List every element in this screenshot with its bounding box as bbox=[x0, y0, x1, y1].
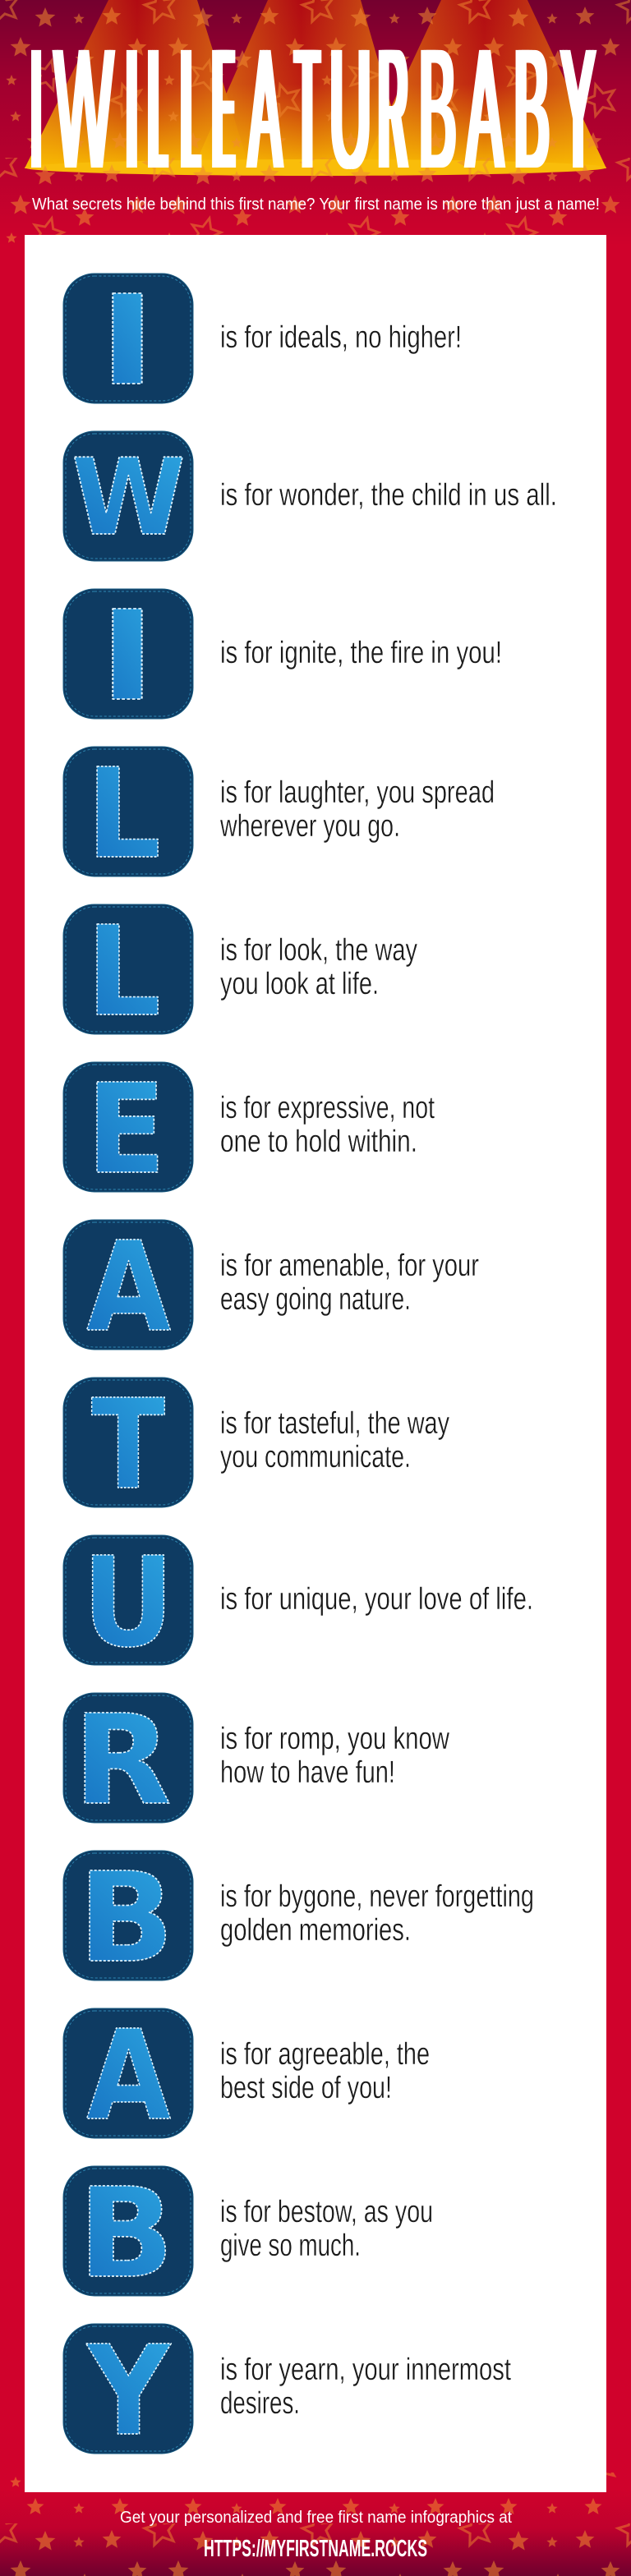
title: W bbox=[54, 14, 113, 205]
spotlight: middle bbox=[193, 0, 409, 168]
icon: letter Y bbox=[63, 2319, 193, 2463]
text: yearn: is for yearn, your innermost bbox=[220, 2353, 511, 2387]
title: I bbox=[115, 14, 147, 205]
text: amenable: easy going nature. bbox=[220, 1282, 411, 1317]
title: A bbox=[467, 14, 502, 205]
title: T bbox=[296, 14, 318, 205]
subtitle: What secrets hide behind this first name? Your first name is more than just a name! bbox=[32, 196, 600, 214]
icon: letter L: L bbox=[86, 742, 161, 886]
icon: letter R: R bbox=[73, 1688, 172, 1833]
icon: letter W: W bbox=[71, 437, 186, 559]
title: L bbox=[150, 14, 166, 205]
title: R bbox=[379, 14, 408, 205]
icon: letter B: B bbox=[78, 2161, 174, 2306]
icon: letter I: I bbox=[99, 269, 156, 413]
text: tasteful: is for tasteful, the way bbox=[220, 1406, 449, 1441]
title: L bbox=[182, 14, 199, 205]
icon: letter L: L bbox=[86, 899, 161, 1044]
footer line: Get your personalized and free first name infographics at bbox=[120, 2509, 512, 2527]
title: E bbox=[214, 14, 233, 205]
text: amenable: is for amenable, for your bbox=[220, 1249, 479, 1283]
icon: letter I bbox=[63, 584, 193, 729]
text: bygone: is for bygone, never forgetting bbox=[220, 1879, 534, 1914]
icon: letter E: E bbox=[86, 1057, 166, 1202]
text: ignite: is for ignite, the fire in you! bbox=[220, 636, 502, 670]
icon: letter B: B bbox=[78, 1846, 174, 1990]
text: bestow: give so much. bbox=[220, 2229, 361, 2263]
star pattern bottom bbox=[0, 2472, 631, 2576]
row: E expressive bbox=[63, 1057, 435, 1202]
row: I ideals bbox=[63, 269, 462, 413]
row: L laughter bbox=[63, 742, 495, 886]
title: U bbox=[329, 14, 371, 205]
icon: letter L bbox=[63, 742, 193, 886]
icon: letter Y: Y bbox=[85, 2319, 172, 2463]
footer url: HTTPS://MYFIRSTNAME.ROCKS bbox=[204, 2536, 427, 2562]
row: A agreeable bbox=[63, 2003, 430, 2148]
row: A amenable bbox=[63, 1215, 479, 1359]
title: B bbox=[419, 14, 457, 205]
icon: letter A: A bbox=[86, 1215, 171, 1359]
text: expressive: one to hold within. bbox=[220, 1125, 417, 1159]
icon: letter I bbox=[63, 269, 193, 413]
text: tasteful: you communicate. bbox=[220, 1440, 411, 1474]
text: romp: is for romp, you know bbox=[220, 1722, 449, 1756]
text: bygone: golden memories. bbox=[220, 1913, 411, 1948]
row: Y yearn bbox=[63, 2319, 511, 2463]
spotlight floor bbox=[25, 159, 606, 176]
text: look: you look at life. bbox=[220, 967, 379, 1001]
title: I bbox=[21, 14, 51, 205]
row: B bygone bbox=[63, 1846, 534, 1990]
text: romp: how to have fun! bbox=[220, 1755, 395, 1790]
title: A bbox=[249, 14, 281, 205]
spotlight: right bbox=[362, 0, 606, 168]
text: look: is for look, the way bbox=[220, 933, 417, 968]
text: yearn: desires. bbox=[220, 2386, 300, 2421]
text: expressive: is for expressive, not bbox=[220, 1091, 435, 1125]
text: agreeable: best side of you! bbox=[220, 2071, 392, 2105]
text: laughter: is for laughter, you spread bbox=[220, 775, 495, 810]
icon: letter T bbox=[63, 1373, 193, 1517]
star pattern top bbox=[0, 0, 631, 246]
title: Y bbox=[561, 14, 595, 205]
icon: letter T: T bbox=[91, 1373, 165, 1517]
icon: letter I: I bbox=[99, 584, 156, 729]
icon: letter A: A bbox=[86, 2003, 171, 2148]
text: agreeable: is for agreeable, the bbox=[220, 2037, 430, 2072]
text: laughter: wherever you go. bbox=[219, 809, 400, 844]
row: R romp bbox=[63, 1688, 449, 1833]
text: ideals: is for ideals, no higher! bbox=[220, 320, 462, 355]
text: unique: is for unique, your love of life. bbox=[220, 1582, 533, 1617]
row: U unique bbox=[63, 1530, 533, 1675]
title: B bbox=[514, 14, 549, 205]
icon: letter U: U bbox=[82, 1530, 174, 1675]
row: L look bbox=[63, 899, 417, 1044]
row: T tasteful bbox=[63, 1373, 449, 1517]
icon: letter L bbox=[63, 899, 193, 1044]
icon: letter E bbox=[63, 1057, 193, 1202]
spotlight: left bbox=[25, 0, 250, 168]
row: B bestow bbox=[63, 2161, 433, 2306]
row: W wonder bbox=[63, 431, 557, 561]
text: bestow: is for bestow, as you bbox=[220, 2195, 433, 2229]
title bbox=[21, 14, 596, 205]
row: I ignite bbox=[63, 584, 502, 729]
